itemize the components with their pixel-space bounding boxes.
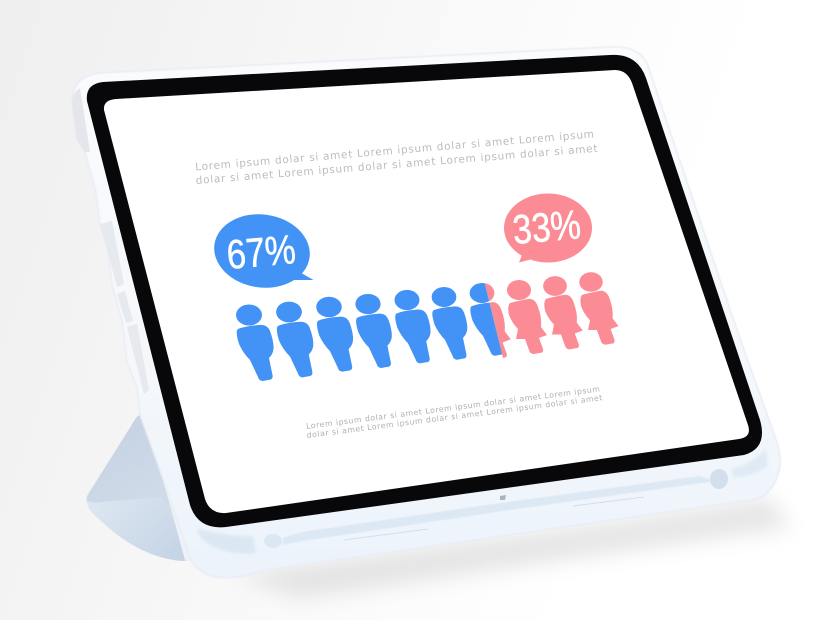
case shadow xyxy=(235,497,790,598)
person 10 xyxy=(579,272,618,345)
speech bubble: 33% xyxy=(504,194,592,262)
speech bubble: 33%: 33% xyxy=(511,201,583,253)
person 5 xyxy=(395,290,431,363)
bottom lorem ipsum text: dolar si amet Lorem ipsum dolar si amet Lorem ipsum dolar si amet xyxy=(306,393,603,440)
person 8 xyxy=(507,280,547,354)
person 7: split blue and pink xyxy=(470,283,511,359)
top lorem ipsum text: Lorem ipsum dolar si amet Lorem ipsum dolar si amet Lorem ipsum xyxy=(195,128,594,173)
top lorem ipsum text: dolar si amet Lorem ipsum dolar si amet Lorem ipsum dolar si amet xyxy=(195,143,598,187)
people row: 67 percent blue, 33 percent pink xyxy=(236,272,618,381)
speech bubble: 67%: 67% xyxy=(225,227,298,279)
folded stand cover xyxy=(86,413,200,565)
case side buttons xyxy=(100,221,149,394)
black bezel xyxy=(87,55,762,527)
person 1 xyxy=(236,304,274,381)
person 3 xyxy=(316,297,353,372)
person 2 xyxy=(276,302,313,377)
pencil groove xyxy=(197,448,768,554)
screen xyxy=(104,70,749,513)
case left edge shading xyxy=(72,88,90,152)
person 9 xyxy=(543,276,583,349)
speech bubble: 67% xyxy=(209,208,315,294)
tablet case xyxy=(72,47,780,578)
person 6 xyxy=(432,287,467,360)
person 4 xyxy=(355,294,392,368)
bottom lorem ipsum text: Lorem ipsum dolar si amet Lorem ipsum dolar si amet Lorem ipsum xyxy=(306,384,600,431)
